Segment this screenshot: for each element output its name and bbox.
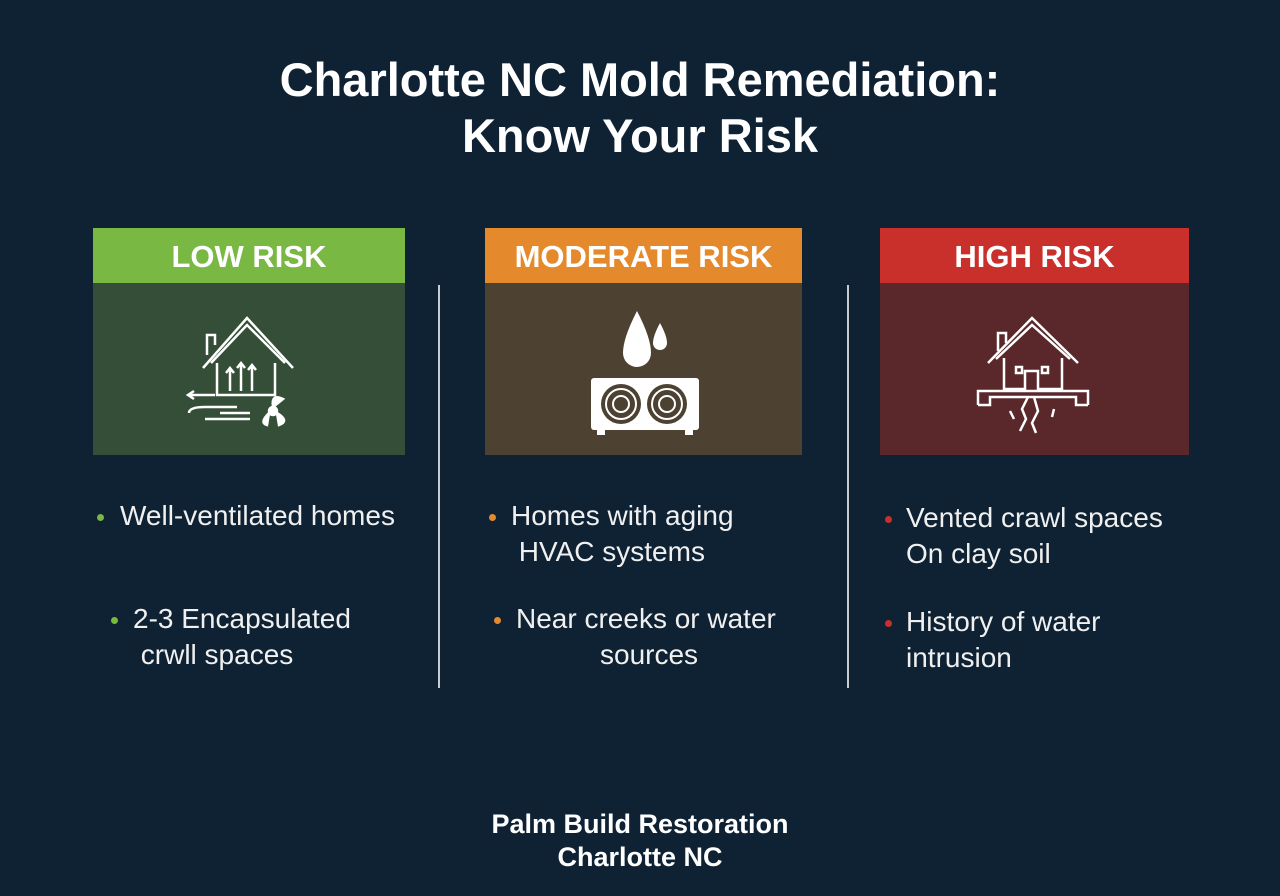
header: high risk [880, 228, 1189, 283]
bullets: moderate: sources [600, 639, 698, 670]
divider [438, 285, 440, 688]
title: Know Your Risk [462, 109, 818, 162]
bullets: low: crwll spaces [141, 639, 293, 670]
title: Charlotte NC Mold Remediation: [280, 53, 1000, 106]
bullets: moderate: Homes with aging [511, 500, 734, 531]
bullets: low: 2-3 Encapsulated [133, 603, 351, 634]
divider [847, 285, 849, 688]
bullets: high: intrusion [906, 642, 1012, 673]
footer [491, 809, 789, 872]
bullets: high: Vented crawl spaces [906, 502, 1163, 533]
header: low risk: LOW RISK [172, 239, 326, 274]
header: high risk: HIGH RISK [954, 239, 1115, 274]
panel: high risk [880, 228, 1189, 455]
header: moderate risk [485, 228, 802, 283]
bullets: low: Well-ventilated homes [120, 500, 395, 531]
panel: moderate risk [485, 228, 802, 455]
icon: ventilated house [186, 316, 294, 427]
icon: cracked foundation house [976, 316, 1090, 434]
footer: Palm Build Restoration [491, 809, 789, 839]
icon: water drops and HVAC [591, 311, 699, 435]
footer: Charlotte NC [557, 842, 722, 872]
bullets: high [885, 502, 1163, 673]
header: moderate risk: MODERATE RISK [515, 239, 772, 274]
bullets: high: History of water [906, 606, 1100, 637]
bullets: low [97, 500, 395, 670]
header: low risk [93, 228, 405, 283]
bullets: moderate: Near creeks or water [516, 603, 776, 634]
bullets: moderate: HVAC systems [519, 536, 705, 567]
bullets: moderate [489, 500, 776, 670]
title [280, 53, 1000, 162]
panel: low risk [93, 228, 405, 455]
bullets: high: On clay soil [906, 538, 1051, 569]
